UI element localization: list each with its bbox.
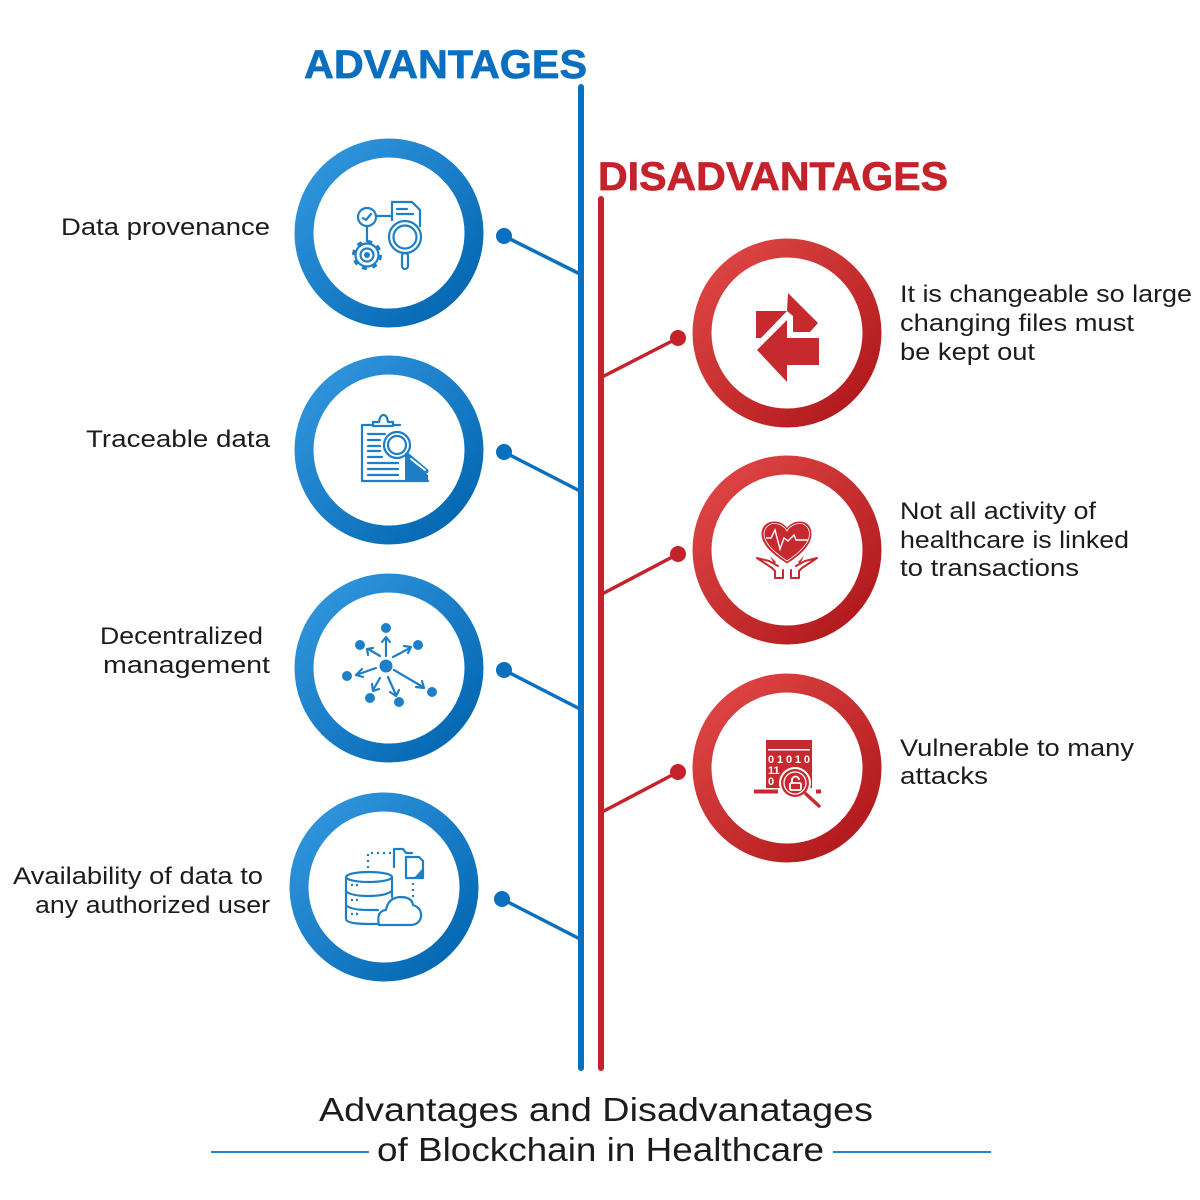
label: traceable data: Traceable data <box>86 426 271 453</box>
icon: laptop with binary and padlock magnifier: 01010 <box>768 754 810 766</box>
label: changeable: It is changeable so large <box>900 281 1192 308</box>
ring <box>702 465 872 635</box>
ring <box>299 802 469 972</box>
disadvantage 2: healthcare activity <box>602 465 1129 635</box>
ring <box>702 248 872 418</box>
label: changeable <box>900 281 1192 366</box>
label: data provenance: Data provenance <box>61 214 270 241</box>
connector <box>496 228 580 274</box>
blue vertical timeline <box>578 84 584 1071</box>
advantage 3: decentralized management <box>100 583 580 753</box>
disadvantage 3: vulnerable to attacks <box>602 683 1134 853</box>
title rule left <box>211 1151 369 1153</box>
bottom title: Advantages and Disadvanatages <box>319 1091 873 1128</box>
connector <box>496 444 580 491</box>
label: decentralized management: management <box>103 652 270 679</box>
ring <box>702 683 872 853</box>
bottom title: of Blockchain in Healthcare <box>377 1131 824 1168</box>
connector <box>494 891 580 939</box>
title rule right <box>833 1151 991 1153</box>
connector <box>602 546 686 594</box>
label: healthcare activity: healthcare is linked <box>900 527 1129 554</box>
label: availability of data: any authorized user <box>35 892 270 919</box>
advantage 4: availability of data <box>13 802 580 972</box>
red vertical timeline <box>598 196 604 1071</box>
icon: heart held by hands <box>757 522 817 578</box>
advantage 1: data provenance <box>61 148 580 318</box>
label: vulnerable: attacks <box>900 763 988 790</box>
ring <box>304 583 474 753</box>
label: availability of data <box>13 863 270 919</box>
icon: two opposing arrows <box>756 293 819 382</box>
label: vulnerable: Vulnerable to many <box>900 735 1134 762</box>
heading: advantages: ADVANTAGES <box>304 43 587 87</box>
label: decentralized management: Decentralized <box>100 623 263 650</box>
icon: database, cloud and folder <box>346 849 423 925</box>
connector <box>602 330 686 377</box>
connector <box>496 662 580 709</box>
label: healthcare activity <box>900 498 1129 582</box>
icon: document with magnifier and gear <box>354 202 421 269</box>
label: changeable: be kept out <box>900 339 1035 366</box>
advantage 2: traceable data <box>86 365 580 535</box>
ring <box>304 365 474 535</box>
icon: laptop with binary and padlock magnifier: 0 <box>768 776 774 788</box>
label: decentralized management <box>100 623 270 679</box>
icon: network hub with arrows <box>342 623 437 707</box>
ring <box>304 148 474 318</box>
connector <box>602 764 686 812</box>
label: availability of data: Availability of data to <box>13 863 263 890</box>
disadvantage 1: changeable <box>602 248 1192 418</box>
label: healthcare activity: Not all activity of <box>900 498 1096 525</box>
bottom title <box>319 1091 873 1168</box>
label: healthcare activity: to transactions <box>900 555 1079 582</box>
icon: laptop with binary and padlock magnifier <box>754 740 821 806</box>
heading: disadvantages: DISADVANTAGES <box>598 155 948 199</box>
icon: laptop with binary and padlock magnifier: 11 <box>768 765 780 777</box>
icon: clipboard with magnifier <box>362 415 428 482</box>
label: changeable: changing files must <box>900 310 1134 337</box>
label: vulnerable <box>900 735 1134 790</box>
